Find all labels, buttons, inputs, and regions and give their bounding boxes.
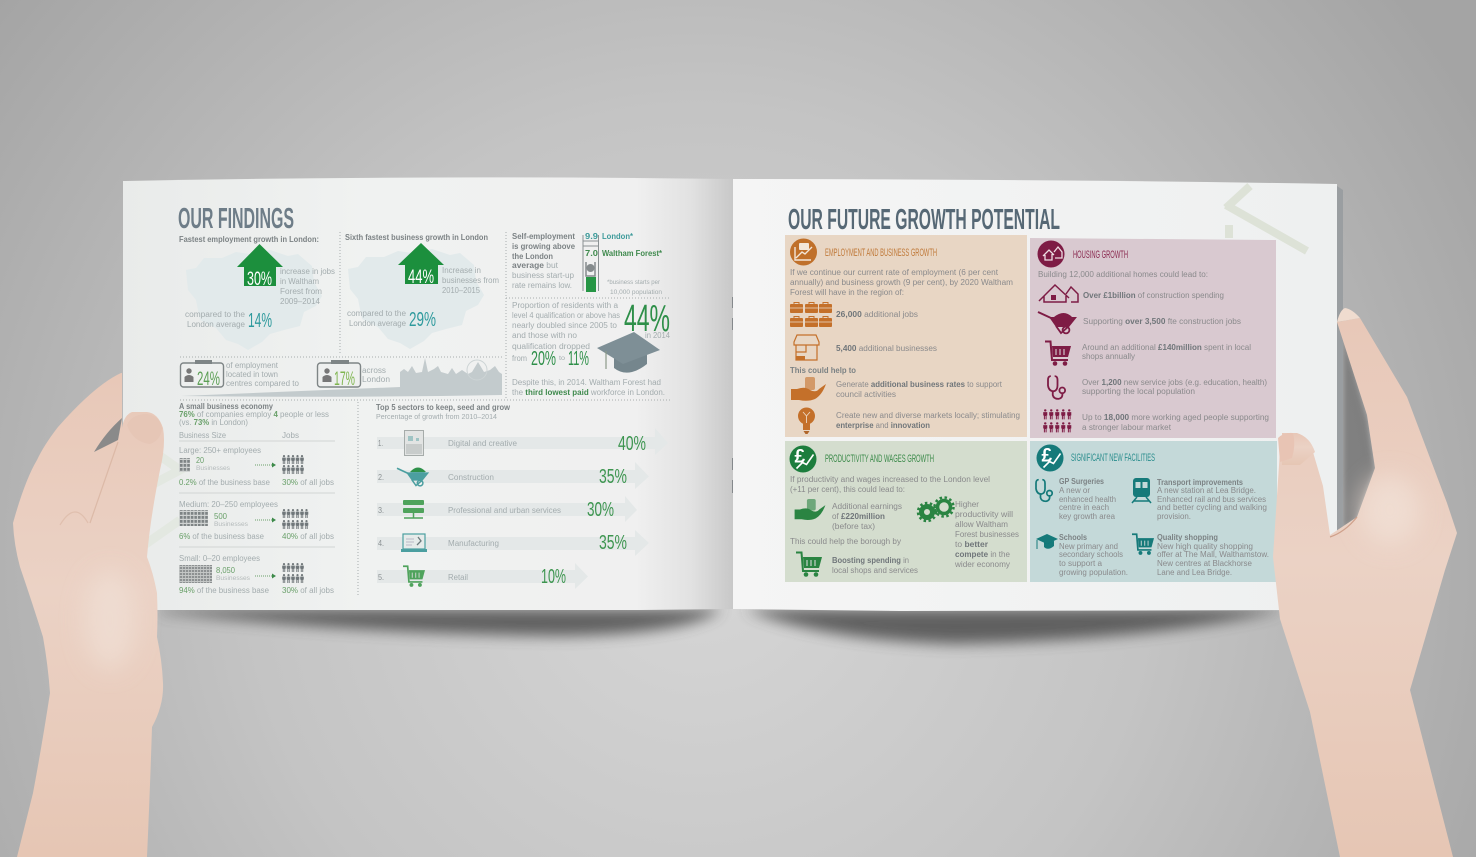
icon: cart [796,552,822,577]
row: small businesses: Small: 0–20 employees [179,554,260,563]
row: large businesses: Large: 250+ employees [179,446,261,455]
qualifications: and those with no [512,331,578,340]
qualifications [512,298,671,397]
panel: housing growth: Over £1billion of construction spending [1083,291,1224,300]
sector 5 [377,563,588,589]
facility: transport improvements: and better cycling and walking [1157,503,1267,512]
stat: employment growth [179,235,335,350]
panel: productivity and wages growth: If productivity and wages increased to the London level [790,475,990,484]
panel: productivity and wages growth: (+11 per cent), this could lead to: [790,485,905,494]
sector 3: 30% [587,499,614,521]
row: large businesses: 20 [196,456,204,465]
panel: housing growth: HOUSING GROWTH [1073,249,1128,261]
town centre employment with skyline: located in town [226,370,278,379]
thumbnail [1278,433,1294,462]
panel: employment and business growth: If we continue our current rate of employment (6 per cent [790,268,999,277]
stat: business growth [345,233,499,349]
facility: transport improvements: provision. [1157,512,1191,521]
sector 2: 2. [378,473,384,482]
row: large businesses: 0.2% of the business base [179,478,271,487]
row: medium businesses: 6% of the business base [179,532,265,541]
sector 1: 40% [618,433,646,455]
left page: our findings [123,177,733,610]
panel: employment and business growth: Generate additional business rates to support [836,380,1003,389]
facility: quality shopping: Quality shopping [1157,533,1218,542]
facility: quality shopping: New centres at Blackhorse [1157,559,1253,568]
sector 1: Digital and creative [448,439,518,448]
panel: housing growth: Over 1,200 new service jobs (e.g. education, health) [1082,378,1267,387]
self-employment: Self-employment [512,232,575,241]
icon: hand with coins [791,377,826,401]
stat: business growth: businesses from [442,276,499,285]
town centre employment with skyline: London [362,375,390,384]
sector 4: 35% [599,532,627,554]
icon: graduation cap [597,332,660,373]
title: OUR FUTURE GROWTH POTENTIAL [788,204,1060,236]
icon: pound growth badge [790,446,816,472]
stat: business growth: Sixth fastest business growth in London [345,233,488,242]
stat: employment growth: compared to the [185,310,246,319]
sector 5: Retail [448,573,468,582]
facility: GP surgeries: GP Surgeries [1059,477,1104,486]
panel: housing growth: Building 12,000 additional homes could lead to: [1038,270,1208,279]
self-employment: business start-up [512,271,575,280]
self-employment: London* [602,232,634,241]
self-employment: is growing above [512,242,576,251]
panel: productivity and wages growth: local shops and services [832,566,918,575]
right hand [1273,308,1457,857]
facility: schools: secondary schools [1059,550,1123,559]
panel: productivity and wages growth: This could help the borough by [790,537,901,546]
stat: business growth: 2010–2015 [442,286,481,295]
row: medium businesses: Medium: 20–250 employees [179,500,278,509]
small business economy table: 76% of companies employ 4 people or less [179,410,329,419]
facility: quality shopping: New high quality shopping [1157,542,1253,551]
self-employment: 10,000 population [610,289,662,296]
book shadow [160,330,1375,644]
panel: housing growth [1030,238,1276,438]
town centre employment with skyline: centres compared to [226,379,300,388]
self-employment: Waltham Forest* [602,249,663,258]
sector 1: 1. [378,439,383,448]
panel: productivity and wages growth [785,441,1027,582]
back of hand highlight [84,570,136,670]
panel: housing growth: supporting the local population [1082,387,1195,396]
panel: productivity and wages growth: wider economy [954,560,1010,569]
icon: pound growth badge [1036,444,1064,472]
row: small businesses [179,554,334,595]
facility: schools: growing population. [1059,568,1128,577]
self-employment: the London [512,252,553,261]
panel: housing growth: Supporting over 3,500 fte construction jobs [1083,317,1241,326]
panel: productivity and wages growth: Additional earnings [832,502,902,511]
row: medium businesses [179,500,334,541]
facility: GP surgeries: enhanced health [1059,495,1116,504]
right page: future growth [732,179,1337,611]
qualifications: level 4 qualification or above has [512,311,620,320]
stat: employment growth: Fastest employment growth in London: [179,235,319,244]
sector 3: 3. [378,506,384,515]
self-employment: 9.9 [585,232,599,241]
row: small businesses: Businesses [216,575,251,582]
stat: business growth: Increase in [442,266,481,275]
icon: wheelbarrow [1038,312,1077,333]
row: small businesses: 94% of the business base [179,586,270,595]
sector 2 [377,462,649,489]
icon: stethoscope [1048,376,1065,399]
small business economy table: (vs. 73% in London) [179,418,248,427]
qualifications: Proportion of residents with a [512,301,619,310]
panel: employment and business growth: Create new and diverse markets locally; stimulating [836,411,1020,420]
panel: employment and business growth: EMPLOYMENT AND BUSINESS GROWTH [825,247,937,259]
qualifications: 20% [531,348,556,370]
panel: housing growth: shops annually [1082,352,1135,361]
stat: employment growth: 14% [248,310,272,332]
sector 5: 10% [541,566,566,588]
page edge stack [1337,186,1343,538]
small business economy table: Jobs [282,431,299,440]
stat: business growth: compared to the [347,309,407,318]
panel: productivity and wages growth: productivity will [955,510,1013,519]
panel: productivity and wages growth: (before tax) [832,522,875,531]
panel: productivity and wages growth: allow Waltham [955,520,1008,529]
facility: transport improvements: A new station at Lea Bridge. [1157,486,1256,495]
icon: houses [1039,285,1078,302]
facility: quality shopping [1132,533,1269,577]
sector 1 [377,428,668,456]
row: small businesses: 30% of all jobs [282,586,334,595]
facility: GP surgeries [1036,477,1116,521]
self-employment [512,232,663,296]
thumbnail [127,414,162,444]
sector 2: 35% [599,466,627,488]
town centre employment with skyline: across [362,366,386,375]
qualifications: from [512,354,527,363]
panel: productivity and wages growth: Boosting spending in [832,556,909,565]
icon: growth chart badge [790,238,817,266]
gap between finger and thumb [94,418,122,452]
panel: employment and business growth: enterprise and innovation [836,421,930,430]
row: medium businesses: Businesses [214,521,249,528]
panel: significant new facilities [1030,441,1277,582]
facility: schools [1036,533,1128,577]
self-employment: average but [512,261,559,270]
self-employment: 7.0 [585,249,599,258]
panel: employment and business growth: 26,000 additional jobs [836,310,918,319]
sector 4: Manufacturing [448,539,499,548]
qualifications: 44% [624,298,670,340]
sector 5: 5. [378,573,384,582]
town centre employment with skyline: 24% [197,369,220,390]
facility: transport improvements [1132,478,1267,521]
panel: productivity and wages growth: Forest businesses [955,530,1019,539]
facility: schools: to support a [1059,559,1103,568]
qualifications: 11% [568,348,589,370]
panel: employment and business growth: Forest will have in the region of: [790,288,904,297]
row: large businesses: Businesses [196,465,231,472]
row: large businesses [179,446,334,487]
facility: GP surgeries: A new or [1059,486,1090,495]
town centre employment with skyline [180,358,502,397]
icon: hand with coins [795,499,825,520]
icon: light bulb [798,408,815,434]
panel: productivity and wages growth: of £220million [832,512,885,521]
stat: employment growth: 2009–2014 [280,297,321,306]
panel: employment and business growth [785,235,1027,437]
facility: GP surgeries: key growth area [1059,512,1116,521]
sector 4: 4. [378,539,384,548]
panel: productivity and wages growth: to better [955,540,988,549]
facility: schools: New primary and [1059,542,1118,551]
skyline [181,358,502,397]
icon: briefcases [790,302,832,327]
icon: gears [918,498,954,521]
panel: housing growth: Around an additional £140million spent in local [1082,343,1251,352]
facility: GP surgeries: centre in each [1059,503,1109,512]
facility: quality shopping: Lane and Lea Bridge. [1157,568,1232,577]
town centre employment with skyline: of employment [226,361,279,370]
row: medium businesses: 40% of all jobs [282,532,334,541]
sector 3: Professional and urban services [448,506,561,515]
stat: employment growth: London average [187,320,246,329]
panel: productivity and wages growth: Higher [955,500,979,509]
row: small businesses: 8,050 [216,566,236,575]
top 5 sectors arrow chart [376,403,668,589]
panel: employment and business growth: 5,400 additional businesses [836,344,937,353]
small business economy table: A small business economy [179,402,274,411]
shadow beside right hand [1335,330,1375,535]
stat: business growth: London average [349,319,407,328]
qualifications: to [559,356,566,362]
qualifications: the third lowest paid workforce in London. [512,388,665,397]
town centre employment with skyline: 17% [334,369,355,390]
top 5 sectors arrow chart: Top 5 sectors to keep, seed and grow [376,403,511,412]
row: large businesses: 30% of all jobs [282,478,334,487]
dividers [180,232,670,597]
panel: housing growth: Up to 18,000 more working aged people supporting [1082,413,1269,422]
icon: cart [1045,342,1071,366]
top 5 sectors arrow chart: Percentage of growth from 2010–2014 [376,412,497,421]
sector 4 [377,530,649,556]
qualifications: Despite this, in 2014. Waltham Forest had [512,378,661,387]
facility: transport improvements: Transport improvements [1157,478,1243,487]
icon: shop [794,335,819,360]
row: medium businesses: 500 [214,512,228,521]
stat: business growth: 29% [409,309,436,331]
stat: employment growth: in Waltham [280,277,319,286]
panel: productivity and wages growth: PRODUCTIVITY AND WAGES GROWTH [825,453,934,465]
stat: business growth: 44% [408,267,434,288]
qualifications: nearly doubled since 2005 to [512,321,618,330]
icon: people [1043,409,1071,432]
self-employment: rate remains low. [512,281,572,290]
panel: employment and business growth: This could help to [790,366,856,375]
staples [732,297,734,493]
facility: transport improvements: Enhanced rail and bus services [1157,495,1266,504]
facility: schools: Schools [1059,533,1087,542]
facility: quality shopping: offer at The Mall, Walthamstow. [1157,550,1269,559]
stat: employment growth: increase in jobs [280,267,335,276]
stat: employment growth: Forest from [280,287,322,296]
left hand [13,373,164,857]
panel: significant new facilities: SIGNIFICANT NEW FACILITIES [1071,452,1155,464]
qualifications: qualification dropped [512,342,590,351]
title: OUR FINDINGS [178,203,294,235]
sector 2: Construction [448,473,494,482]
self-employment: *business starts per [607,279,661,286]
panel: productivity and wages growth: compete in the [955,550,1011,559]
sector 3 [377,496,637,522]
small business economy table [179,402,335,595]
panel: housing growth: a stronger labour market [1082,423,1172,432]
stat: employment growth: 30% [247,269,272,290]
back of hand highlight [1360,475,1420,545]
qualifications: in 2014 [645,331,671,340]
small business economy table: Business Size [179,431,227,440]
icon: housing badge [1038,240,1064,268]
panel: employment and business growth: council activities [836,390,896,399]
panel: employment and business growth: annually) and business growth (9 per cent), by 2020 Waltham [790,278,1013,287]
